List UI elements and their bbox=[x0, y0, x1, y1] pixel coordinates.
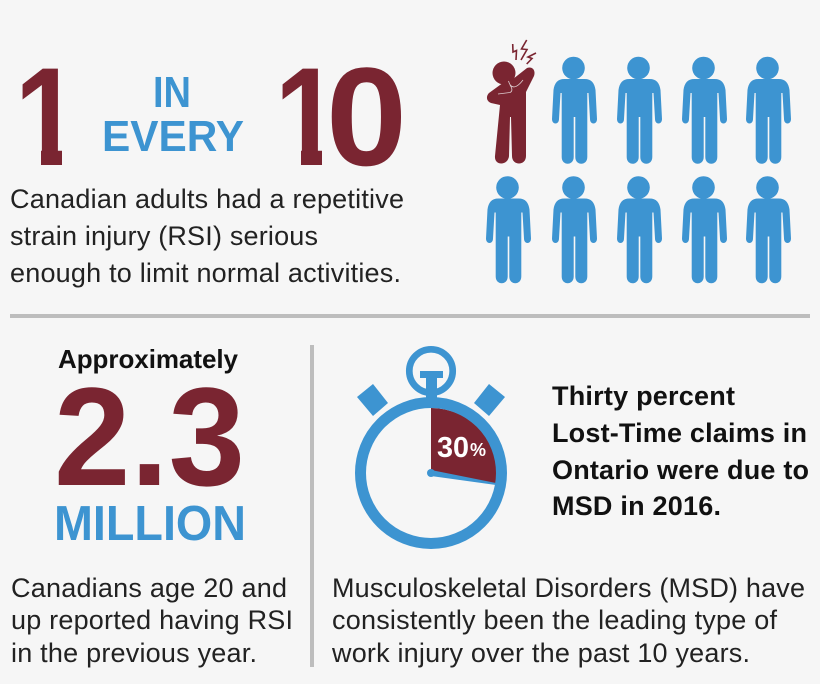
text block: MSD description: work injury over the past 10 years. bbox=[331, 638, 750, 668]
text block: Canadians age 20 bbox=[11, 573, 293, 668]
headline: 1 in every 10: IN bbox=[153, 68, 191, 117]
icon: stopwatch 30%: 30 bbox=[437, 432, 469, 464]
headline: 1 in every 10 bbox=[22, 67, 401, 166]
text block: Canadians age 20: Canadians age 20 and bbox=[11, 573, 287, 603]
text block: thirty percent bbox=[552, 381, 809, 521]
text block: thirty percent: MSD in 2016. bbox=[552, 491, 721, 521]
headline: 1 in every 10: EVERY bbox=[102, 112, 244, 161]
stat: 2.3 million: Approximately bbox=[58, 344, 239, 374]
horizontal divider bbox=[10, 314, 810, 318]
text block: RSI description bbox=[10, 184, 404, 288]
text block: RSI description: Canadian adults had a repetitive bbox=[10, 184, 404, 214]
icon: injured person bbox=[487, 40, 536, 164]
text block: MSD description: Musculoskeletal Disorders (MSD) have bbox=[332, 573, 805, 603]
icon: stopwatch 30%: % bbox=[470, 440, 486, 460]
text block: RSI description: strain injury (RSI) serious bbox=[10, 221, 318, 251]
icon: stopwatch 30% bbox=[357, 349, 505, 544]
text block: RSI description: enough to limit normal activities. bbox=[10, 258, 401, 288]
headline: 1 in every 10: 1 bbox=[275, 38, 340, 195]
icon: blue people row 1 bbox=[552, 57, 791, 164]
stat: 2.3 million: 2.3 bbox=[54, 358, 245, 515]
stat: 2.3 million: MILLION bbox=[54, 497, 246, 551]
text block: thirty percent: Thirty percent bbox=[552, 381, 735, 411]
pictogram: ten people, one injured bbox=[486, 40, 791, 283]
text block: Canadians age 20: in the previous year. bbox=[11, 638, 257, 668]
text block: thirty percent: Ontario were due to bbox=[552, 455, 809, 485]
headline: 1 in every 10: 1 bbox=[15, 38, 80, 195]
text block: MSD description: consistently been the leading type of bbox=[332, 605, 777, 635]
text block: Canadians age 20: up reported having RSI bbox=[11, 605, 293, 635]
text block: MSD description bbox=[331, 573, 805, 668]
headline: 1 in every 10: 0 bbox=[326, 38, 407, 195]
icon: blue people row 2 bbox=[486, 176, 791, 283]
vertical divider bbox=[310, 345, 314, 667]
text block: thirty percent: Lost-Time claims in bbox=[552, 418, 807, 448]
